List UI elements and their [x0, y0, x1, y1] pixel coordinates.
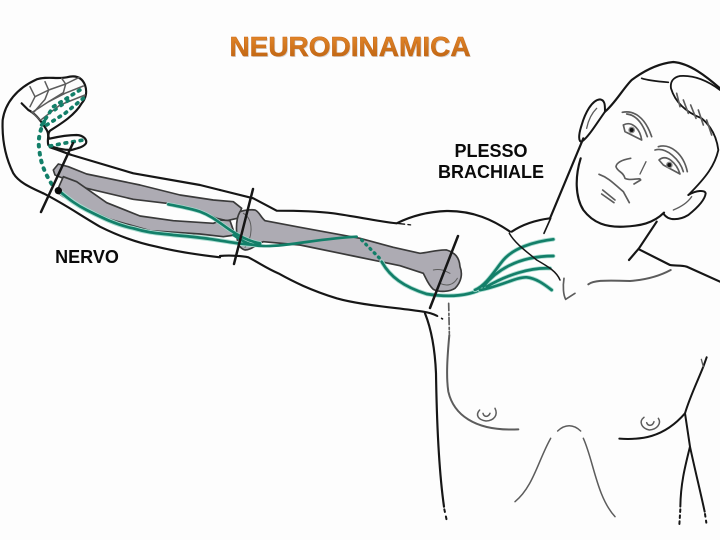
- brachial plexus and nerve: [39, 90, 553, 296]
- nerve: dotted path in hand: [39, 90, 83, 194]
- cut marks: [41, 143, 458, 308]
- hair: [671, 76, 720, 195]
- title: NEURODINAMICA: [230, 32, 472, 63]
- right nipple: [641, 417, 659, 430]
- torso: [425, 303, 707, 525]
- title: NEURODINAMICA: [229, 31, 471, 62]
- nerve: upper arm: [233, 235, 487, 296]
- right chest and flank: [619, 357, 707, 439]
- eyes and brows: [622, 112, 652, 140]
- mouth: [599, 174, 629, 203]
- hand finger creases: [30, 77, 85, 120]
- bone: radius: [57, 177, 235, 237]
- label: plesso brachiale: BRACHIALE: [438, 162, 544, 182]
- nerve glow: [60, 192, 260, 245]
- head and face: [577, 62, 720, 227]
- arm outline with hand: [3, 76, 220, 257]
- head outline: [605, 62, 720, 112]
- arm bones: [53, 164, 461, 291]
- abdomen: [515, 438, 551, 502]
- label: plesso brachiale: PLESSO: [454, 141, 528, 161]
- bone: ulna: [53, 164, 242, 221]
- ears: [579, 99, 605, 142]
- upper arm and shoulder outline: [220, 190, 510, 319]
- left nipple: [478, 408, 496, 421]
- neck and clavicle: [588, 222, 720, 284]
- nerve: plexus branches: [475, 239, 553, 290]
- bone: humerus: [237, 210, 461, 291]
- left neck and shoulder lines: [509, 138, 583, 299]
- nose: [616, 158, 641, 184]
- label: nervo: NERVO: [55, 247, 119, 267]
- nerve: forearm branches: [60, 192, 260, 245]
